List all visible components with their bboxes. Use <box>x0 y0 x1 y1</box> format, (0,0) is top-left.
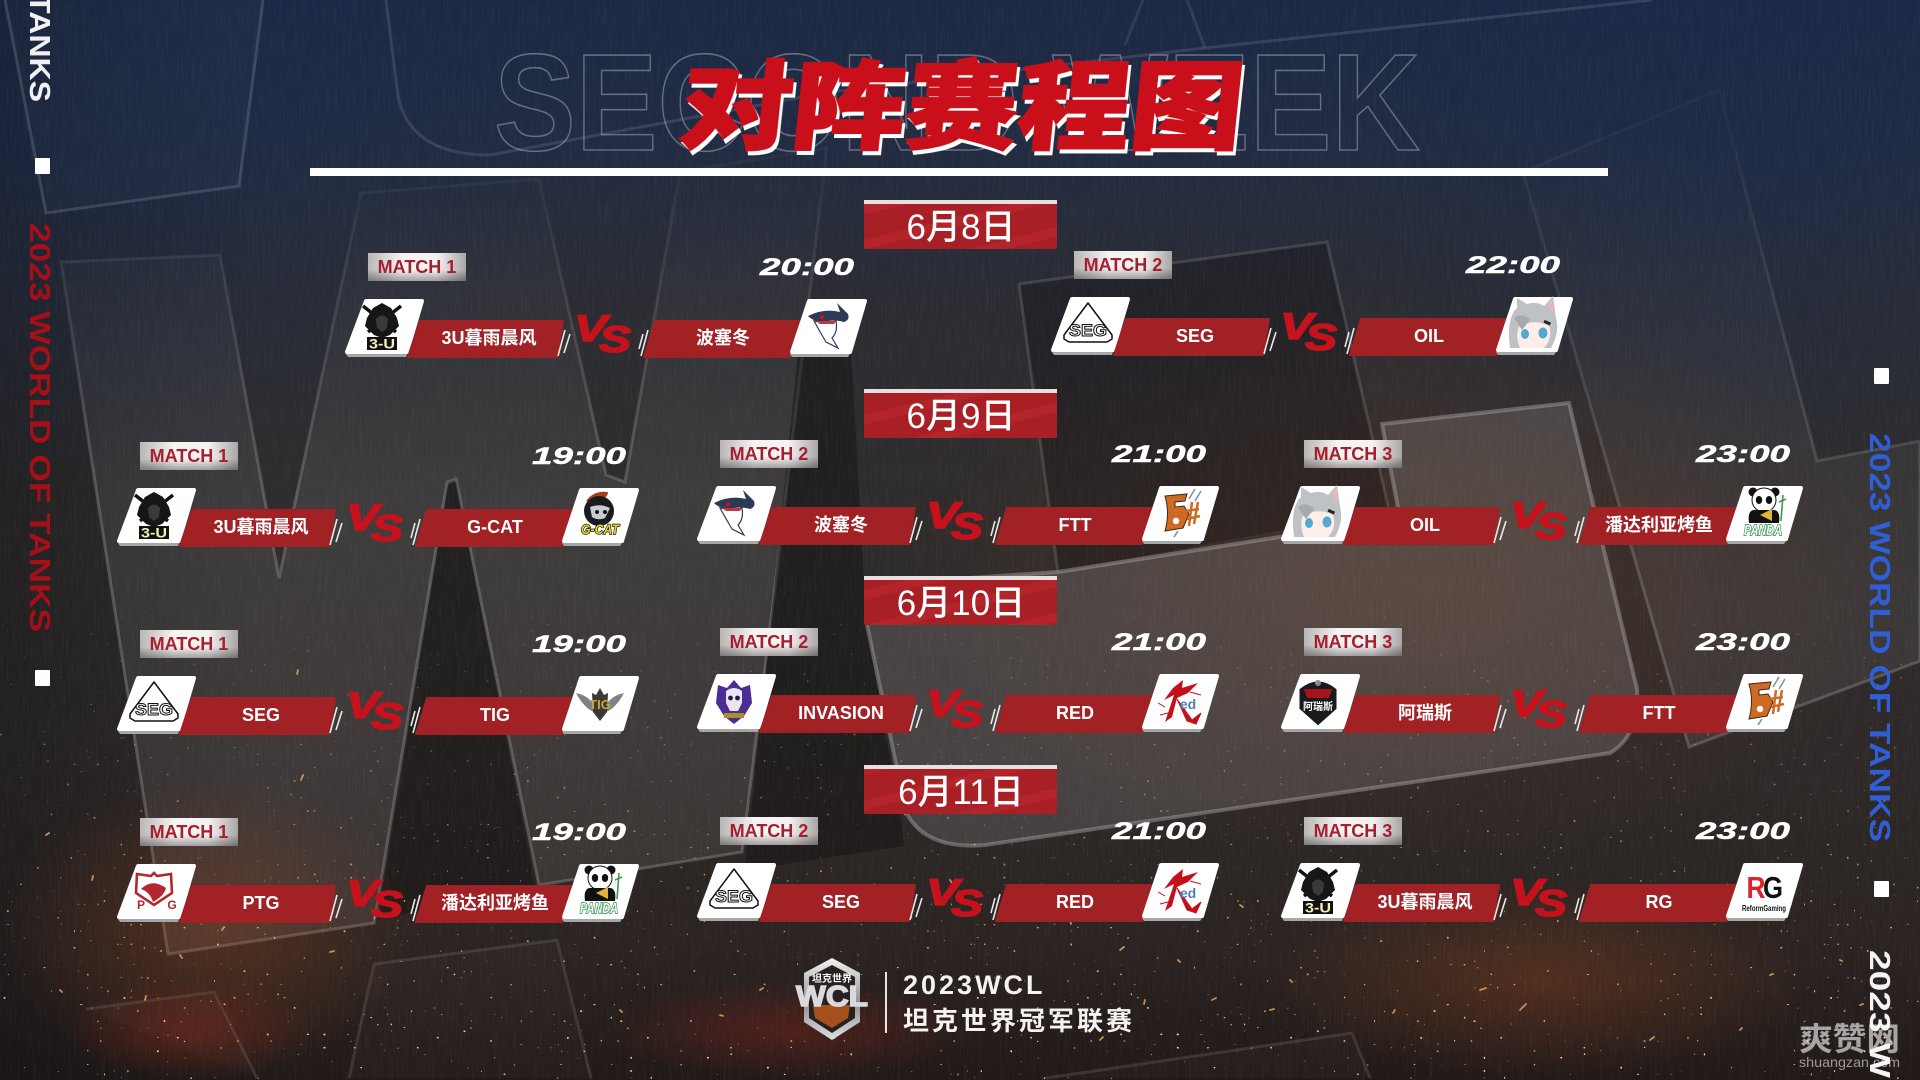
match: June 10 match 3: 23:00 <box>1694 629 1791 656</box>
match: June 9 match 1: 3U暮雨晨风 <box>213 517 309 537</box>
match: June 10 match 2 <box>698 628 1217 735</box>
match: June 11 match 3: RG <box>1646 892 1672 912</box>
source watermark: shuangzan.com <box>1799 1054 1900 1070</box>
match: June 9 match 3: 23:00 <box>1694 441 1791 468</box>
match: June 10 match 3: FTT <box>1642 703 1676 723</box>
match: June 9 match 2: S <box>951 506 983 547</box>
match: June 10 match 3: S <box>1535 694 1567 735</box>
match: June 10 match 1: V <box>346 685 383 726</box>
footer divider <box>885 972 887 1033</box>
match: June 11 match 1: V <box>346 873 383 914</box>
side square right lower <box>1874 881 1889 897</box>
match: June 11 match 1: MATCH 1 <box>150 822 228 842</box>
match: June 11 match 1: 潘达利亚烤鱼 <box>441 892 549 913</box>
match: June 11 match 3: 23:00 <box>1694 818 1791 845</box>
match: June 9 match 1: S <box>371 508 403 549</box>
match: June 11 match 2 <box>698 817 1217 924</box>
match: June 10 match 2: INVASION <box>798 703 884 723</box>
match: June 11 match 1: S <box>371 884 403 925</box>
date banner: June 9 <box>864 389 1057 438</box>
date banner: June 11: 6月11日 <box>898 773 1024 812</box>
match: June 9 match 1: V <box>346 497 383 538</box>
match: June 8 match 2 <box>1052 251 1571 358</box>
title rule <box>310 168 1608 176</box>
match: June 10 match 1: MATCH 1 <box>150 634 228 654</box>
match: June 9 match 1: G-CAT <box>467 517 523 537</box>
match: June 10 match 1: SEG <box>242 705 280 725</box>
match: June 11 match 3 <box>1282 817 1801 924</box>
side text: left red: 2023 WORLD OF TANKS <box>23 223 55 632</box>
match: June 10 match 3 <box>1282 628 1801 735</box>
match: June 11 match 3: V <box>1510 872 1547 913</box>
date banner: June 8: 6月8日 <box>907 208 1015 247</box>
match: June 11 match 2: S <box>951 883 983 924</box>
match: June 9 match 3 <box>1282 440 1801 547</box>
match: June 8 match 2: OIL <box>1414 326 1444 346</box>
match: June 9 match 2: FTT <box>1058 515 1092 535</box>
match: June 10 match 1: TIG <box>480 705 510 725</box>
side square left lower <box>35 670 50 686</box>
match: June 11 match 1 <box>118 818 637 925</box>
match: June 11 match 2: MATCH 2 <box>730 821 808 841</box>
match: June 10 match 2: S <box>951 694 983 735</box>
match: June 11 match 3: MATCH 3 <box>1314 821 1392 841</box>
source watermark: 爽赞网 <box>1799 1021 1900 1057</box>
match: June 10 match 1: 19:00 <box>532 631 627 658</box>
match: June 11 match 2: RED <box>1056 892 1094 912</box>
match: June 11 match 2: 21:00 <box>1110 818 1207 845</box>
match: June 9 match 2 <box>698 440 1217 547</box>
match: June 10 match 2: 21:00 <box>1110 629 1207 656</box>
match: June 8 match 2: S <box>1305 317 1337 358</box>
match: June 9 match 2: MATCH 2 <box>730 444 808 464</box>
match: June 8 match 1: MATCH 1 <box>378 257 456 277</box>
side square right upper <box>1874 368 1889 384</box>
match: June 11 match 1: PTG <box>242 893 280 913</box>
icon: WCL league badge <box>796 958 868 1040</box>
match: June 9 match 1: MATCH 1 <box>150 446 228 466</box>
match: June 10 match 2: RED <box>1056 703 1094 723</box>
match: June 11 match 2: V <box>926 872 963 913</box>
match: June 11 match 3: 3U暮雨晨风 <box>1377 892 1473 912</box>
match: June 10 match 2: MATCH 2 <box>730 632 808 652</box>
match: June 9 match 2: 波塞冬 <box>814 514 868 535</box>
match: June 9 match 1: 19:00 <box>532 443 627 470</box>
match: June 11 match 3: S <box>1535 883 1567 924</box>
match: June 8 match 2: V <box>1280 306 1317 347</box>
date banner: June 10 <box>864 576 1057 625</box>
side text: right blue: 2023 WORLD OF TANKS <box>1863 433 1895 842</box>
source watermark <box>1799 1021 1900 1070</box>
match: June 10 match 3: V <box>1510 683 1547 724</box>
match: June 9 match 3: MATCH 3 <box>1314 444 1392 464</box>
match: June 10 match 2: V <box>926 683 963 724</box>
match: June 8 match 1 <box>346 253 865 360</box>
match: June 8 match 1: 20:00 <box>758 254 855 281</box>
match: June 10 match 1: S <box>371 696 403 737</box>
icon: WCL league badge: WCL <box>796 981 868 1013</box>
match: June 8 match 2: SEG <box>1176 326 1214 346</box>
match: June 9 match 1 <box>118 442 637 549</box>
match: June 8 match 1: 波塞冬 <box>696 327 750 348</box>
match: June 10 match 3: MATCH 3 <box>1314 632 1392 652</box>
match: June 11 match 2: SEG <box>822 892 860 912</box>
side text: right white: 2023 W <box>1863 950 1895 1079</box>
match: June 8 match 2: 22:00 <box>1464 252 1561 279</box>
match: June 9 match 2: V <box>926 495 963 536</box>
match: June 8 match 2: MATCH 2 <box>1084 255 1162 275</box>
footer text <box>903 970 1135 1036</box>
match: June 9 match 3: V <box>1510 495 1547 536</box>
title: 对阵赛程图 <box>674 29 1252 169</box>
match: June 10 match 1 <box>118 630 637 737</box>
match: June 9 match 3: OIL <box>1410 515 1440 535</box>
match: June 8 match 1: S <box>599 319 631 360</box>
footer text: 2023WCL <box>903 970 1046 1000</box>
match: June 9 match 2: 21:00 <box>1110 441 1207 468</box>
match: June 9 match 3: S <box>1535 506 1567 547</box>
match: June 10 match 3: 阿瑞斯 <box>1398 702 1452 723</box>
date banner: June 11 <box>864 765 1057 814</box>
side square left upper <box>35 158 50 174</box>
title background outline text: SECOND WEEK <box>494 26 1420 180</box>
footer text: 坦克世界冠军联赛 <box>903 1006 1135 1036</box>
date banner: June 10: 6月10日 <box>897 584 1025 623</box>
match: June 8 match 1: 3U暮雨晨风 <box>441 328 537 348</box>
match: June 8 match 1: V <box>574 308 611 349</box>
date banner: June 8 <box>864 200 1057 249</box>
date banner: June 9: 6月9日 <box>907 397 1015 436</box>
icon: WCL league badge: 坦克世界 <box>812 972 852 985</box>
match: June 11 match 1: 19:00 <box>532 819 627 846</box>
match: June 9 match 3: 潘达利亚烤鱼 <box>1605 514 1713 535</box>
